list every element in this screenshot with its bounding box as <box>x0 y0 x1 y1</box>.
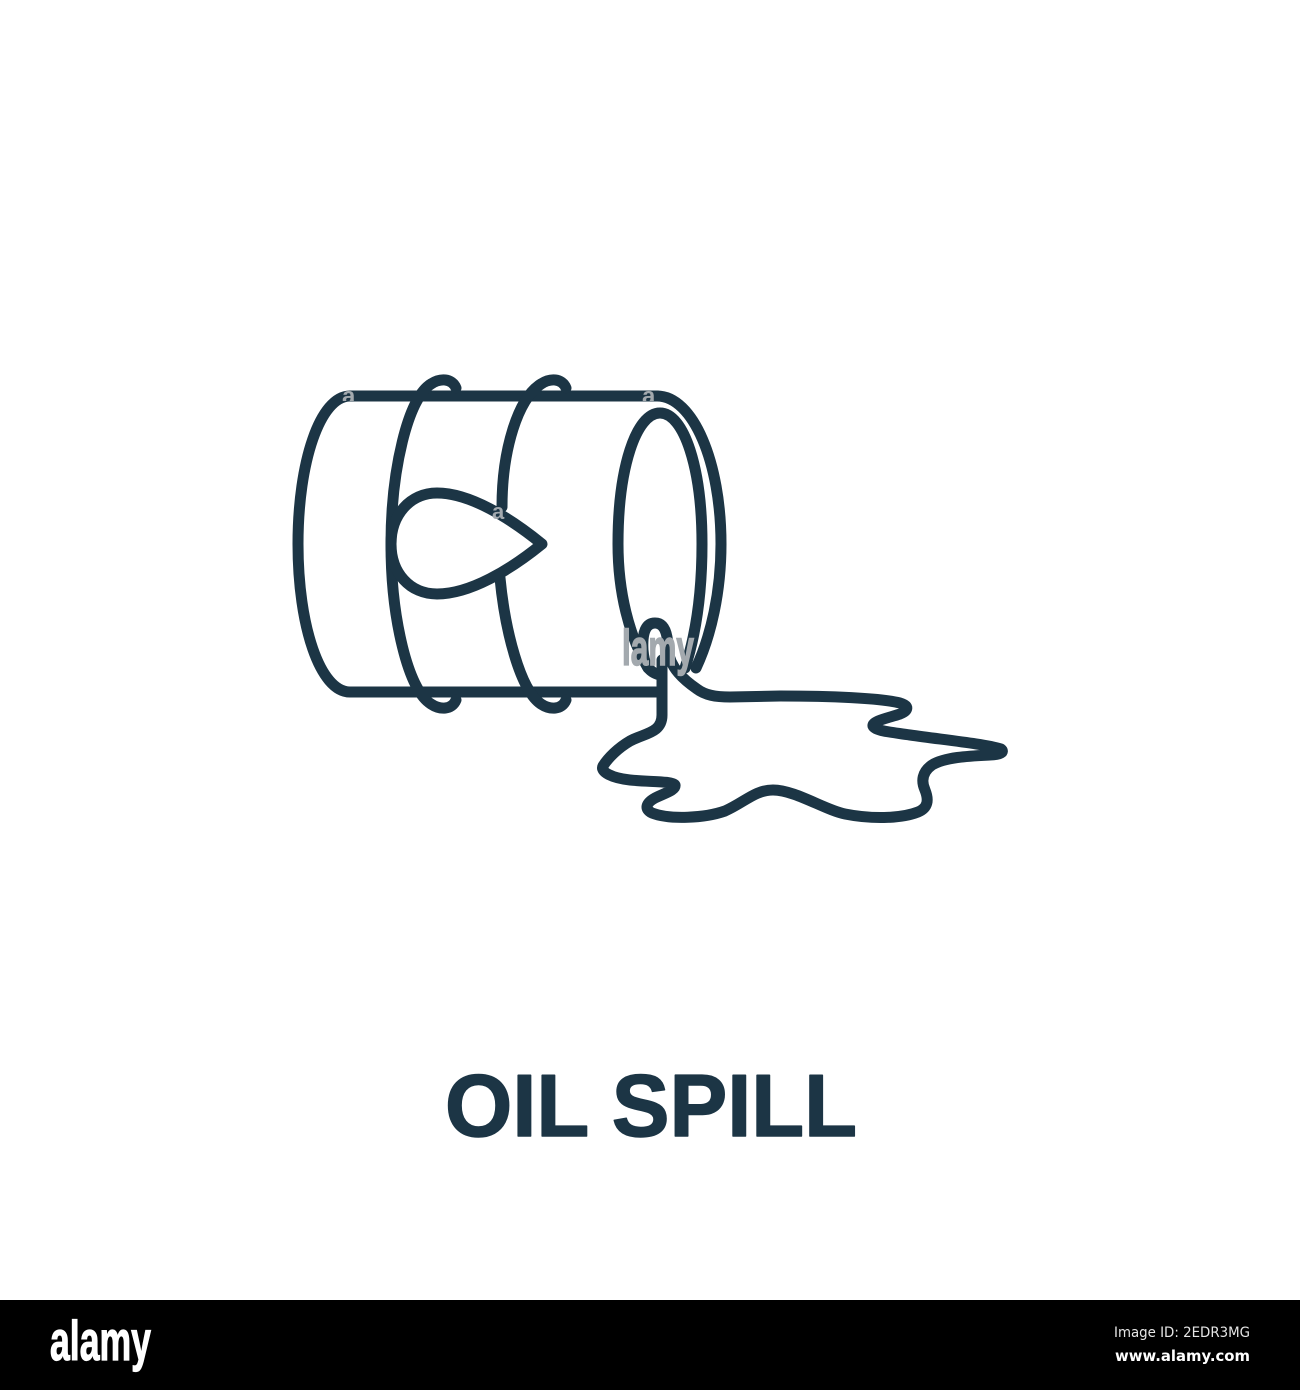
website: www.alamy.com <box>1115 1347 1250 1365</box>
title: OIL SPILL <box>445 1056 857 1155</box>
watermark: alamy over spout: lamy <box>622 620 694 676</box>
logo: alamy: alamy <box>50 1309 151 1372</box>
icon: tipped oil barrel with spill <box>298 380 1002 818</box>
oil puddle <box>603 623 1002 818</box>
barrel body outline <box>298 396 721 692</box>
barrel band left <box>391 380 456 708</box>
watermark fragment: drop: a <box>492 499 505 524</box>
watermark fragment: top left: a <box>342 383 356 410</box>
watermark fragment: top right: a <box>642 383 656 410</box>
barrel band right <box>500 380 566 708</box>
barrel opening <box>618 413 702 668</box>
footer bar <box>0 1300 1300 1390</box>
oil drop emblem <box>391 493 542 594</box>
image id: Image ID: 2EDR3MG <box>1114 1325 1250 1341</box>
